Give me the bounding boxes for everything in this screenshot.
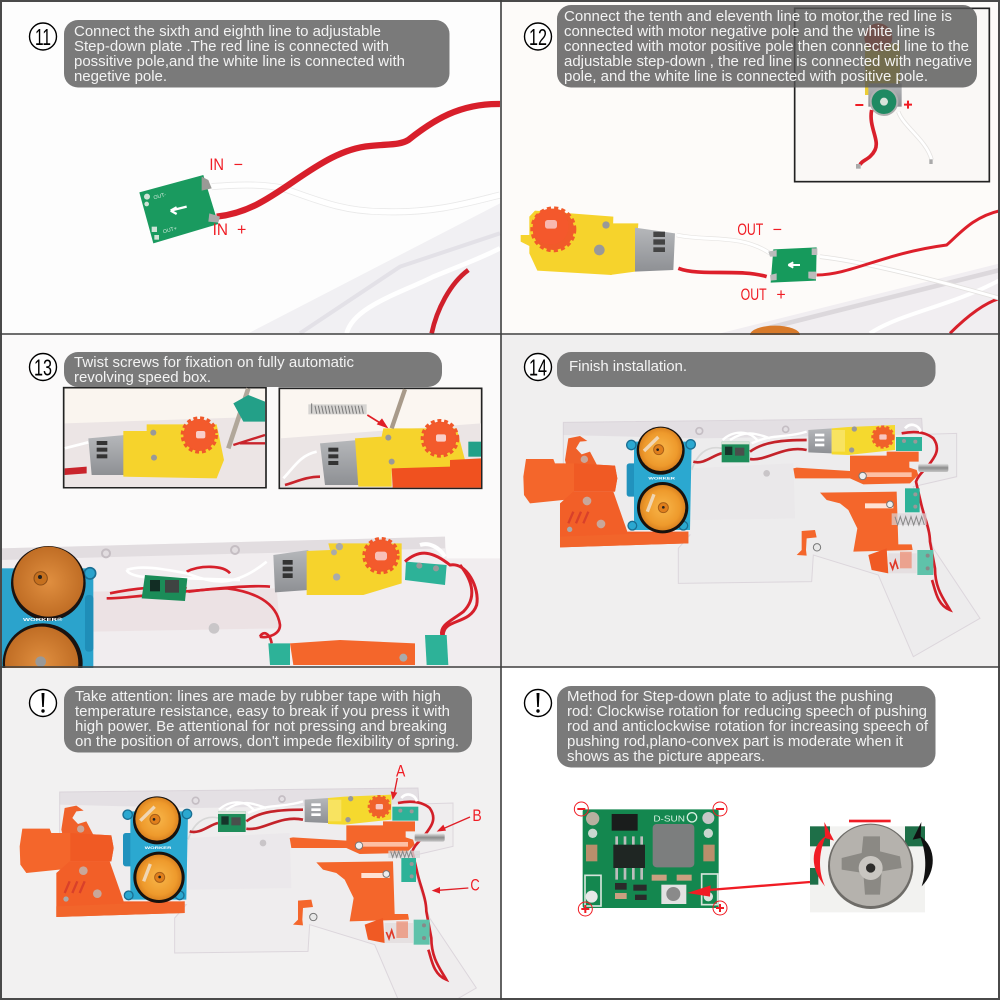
text callout 15: temperature resistance, easy to break if you press it with bbox=[75, 703, 450, 720]
text callout 13: Twist screws for fixation on fully automatic bbox=[74, 354, 354, 371]
photo 15: gun internals bbox=[20, 788, 476, 1000]
text callout 13: revolving speed box. bbox=[74, 369, 211, 386]
text callout 16: rod: Clockwise rotation for reducing speech of pushing bbox=[567, 703, 927, 720]
panel 11: connect step-down plate bbox=[1, 1, 501, 334]
text callout 16: pushing rod,plano-convex part is moderate when it bbox=[567, 733, 904, 750]
panel 16: adjust method bbox=[501, 668, 999, 1000]
panel 14: finished installation bbox=[501, 335, 999, 667]
marker A with arrow bbox=[391, 762, 406, 800]
photo background 13 bbox=[1, 335, 501, 667]
text callout 11: negetive pole. bbox=[74, 68, 167, 85]
text callout 15 bbox=[64, 686, 472, 752]
marker A with arrow: A bbox=[396, 762, 406, 781]
text callout 11: Step-down plate .The red line is connected with bbox=[74, 38, 389, 55]
warning icon bbox=[524, 690, 552, 716]
marker B with arrow bbox=[437, 806, 482, 832]
text callout 12: Connect the tenth and eleventh line to motor,the red line is bbox=[564, 8, 952, 25]
text callout 16: shows as the picture appears. bbox=[567, 748, 765, 765]
step-down plate photo bbox=[574, 802, 727, 916]
text callout 16: Method for Step-down plate to adjust the pushing bbox=[567, 688, 893, 705]
text callout 12: adjustable step-down , the red line is connected with negative bbox=[564, 53, 972, 70]
text callout 16 bbox=[557, 686, 936, 768]
marker C with arrow bbox=[432, 875, 480, 894]
inset: screw with arrow bbox=[279, 388, 482, 488]
photo 14: assembled gun internals bbox=[523, 418, 980, 657]
step number 12: 12 bbox=[529, 24, 547, 50]
text callout 15: Take attention: lines are made by rubber tape with high bbox=[75, 688, 441, 705]
photo 12: motor and step-down plate: OUT bbox=[741, 285, 767, 304]
text callout 16: rod and anticlockwise rotation for increasing speech of bbox=[567, 718, 929, 735]
text callout 15: high power. Be attentional for not pressing and breaking bbox=[75, 718, 447, 735]
panel 13: twist screws bbox=[0, 335, 501, 703]
photo 11: step-down plate and wires: OUT- bbox=[153, 192, 167, 201]
photo 12: motor and step-down plate: OUT bbox=[737, 220, 763, 239]
photo 11: step-down plate and wires: IN bbox=[209, 155, 224, 174]
marker C with arrow: C bbox=[470, 875, 480, 894]
photo 12: motor and step-down plate bbox=[521, 209, 1000, 344]
photo 11: step-down plate and wires: IN bbox=[213, 220, 228, 239]
photo background 14 bbox=[501, 335, 999, 667]
arrow from close-up to plate bbox=[687, 882, 810, 897]
marker B with arrow: B bbox=[472, 806, 482, 825]
photo 13: assembled frame close-up: WORKER® bbox=[23, 616, 63, 623]
panel 15: attention bbox=[1, 668, 501, 1000]
text callout 12: connected with motor positive pole then connected line to the bbox=[564, 38, 969, 55]
warning icon bbox=[30, 690, 56, 716]
text callout 12: connected with motor negative pole and the white line is bbox=[564, 23, 935, 40]
photo 12: motor and step-down plate: + bbox=[776, 285, 786, 304]
text callout 14 bbox=[557, 352, 936, 387]
photo 11: step-down plate and wires: OUT+ bbox=[162, 226, 178, 235]
photo 13: assembled frame close-up bbox=[0, 537, 500, 703]
photo background 16 bbox=[501, 668, 999, 1000]
potentiometer close-up with rotation arrows bbox=[810, 820, 933, 912]
photo 12: motor and step-down plate: − bbox=[773, 220, 782, 239]
text callout 12 bbox=[557, 5, 977, 88]
text callout 11 bbox=[64, 20, 450, 88]
step number 14: 14 bbox=[529, 354, 547, 380]
step number 13: 13 bbox=[34, 354, 52, 380]
inset: motor poles bbox=[795, 8, 989, 182]
photo background 12 bbox=[501, 1, 999, 334]
step-down plate photo: D-SUN bbox=[653, 814, 685, 824]
photo background 11 bbox=[1, 1, 501, 334]
text callout 15: on the position of arrows, don't impede flexibility of spring. bbox=[75, 733, 459, 750]
photo 11: step-down plate and wires: + bbox=[237, 220, 246, 239]
photo 11: step-down plate and wires bbox=[139, 104, 500, 333]
step number 11: 11 bbox=[35, 24, 51, 50]
text callout 11: Connect the sixth and eighth line to adjustable bbox=[74, 23, 381, 40]
text callout 13 bbox=[64, 352, 442, 387]
photo 11: step-down plate and wires: − bbox=[234, 155, 243, 174]
text callout 11: possitive pole,and the white line is connected with bbox=[74, 53, 405, 70]
panel 12: connect motor bbox=[501, 1, 1000, 344]
text callout 12: pole, and the white line is connected with positive pole. bbox=[564, 68, 928, 85]
photo background 15 bbox=[1, 668, 501, 1000]
text callout 14: Finish installation. bbox=[569, 358, 687, 375]
inset: screwdriver fixing gearbox bbox=[64, 388, 266, 488]
